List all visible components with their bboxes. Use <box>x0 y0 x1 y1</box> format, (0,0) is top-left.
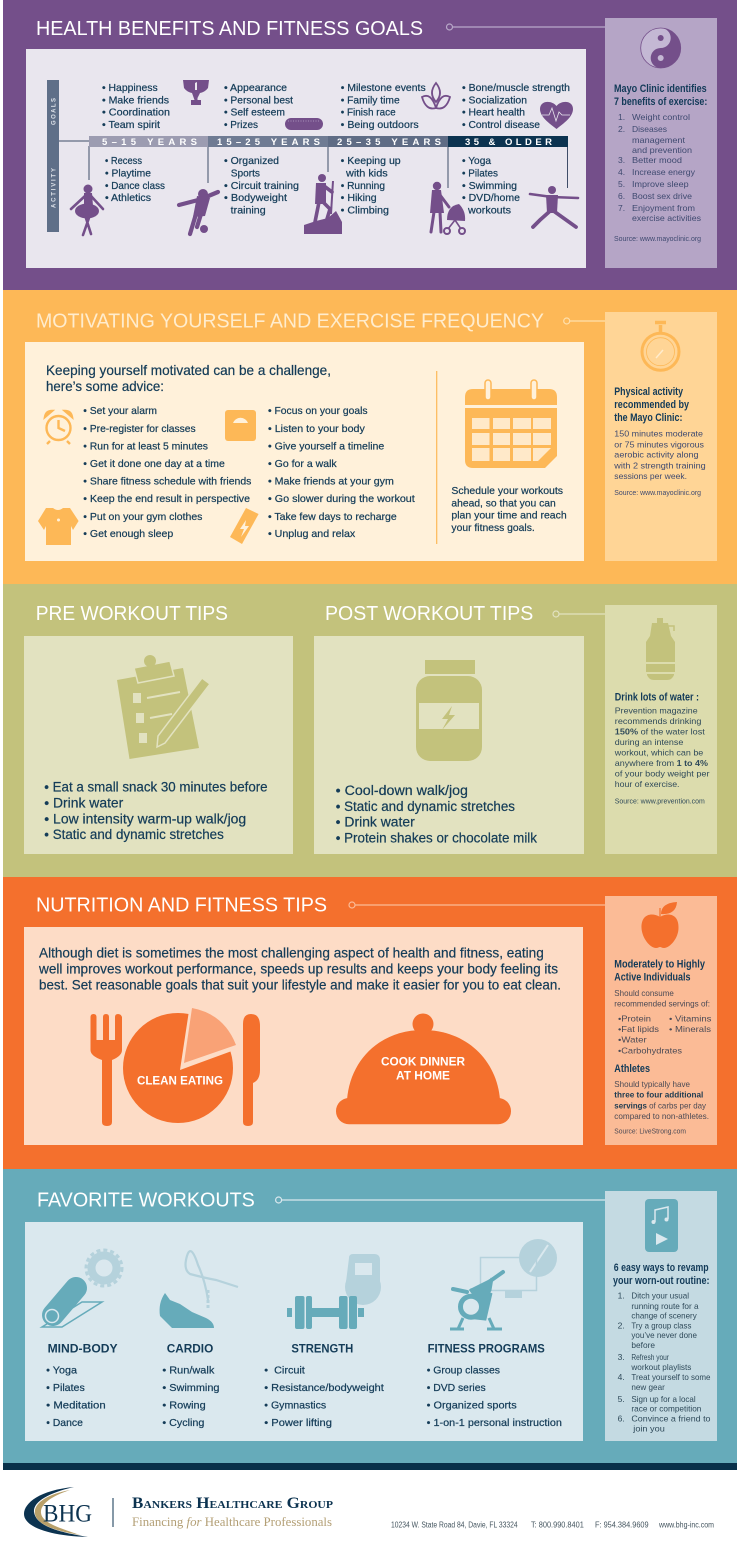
activity list 35 and older: • Swimming <box>462 180 517 192</box>
numbered list: Ditch your usual <box>631 1291 689 1301</box>
schedule note <box>451 485 567 534</box>
activity list 25-35: with kids <box>345 168 388 180</box>
sidebar heading: your worn-out routine: <box>613 1275 710 1287</box>
benefits list: Weight control <box>632 112 690 122</box>
icon: fork <box>90 1014 122 1126</box>
timeline connectors <box>59 141 568 188</box>
post workout list: • Drink water <box>336 815 415 830</box>
sidebar: drink water <box>605 605 717 854</box>
sidebar body: 150% of the water lost <box>615 727 705 737</box>
goals list 35 and older: • Socialization <box>462 94 527 106</box>
sidebar body: hour of exercise. <box>615 779 680 789</box>
panel: pre workout <box>24 636 293 854</box>
icon: cloche: AT HOME <box>396 1071 450 1083</box>
activity list 35 and older: • Yoga <box>462 155 491 167</box>
vertical axis bar <box>47 80 59 232</box>
numbered list: Convince a friend to <box>631 1414 711 1424</box>
fitness programs column: • DVD series <box>427 1382 486 1394</box>
numbered list: Sign up for a local <box>631 1394 696 1404</box>
pre workout list: • Static and dynamic stretches <box>44 827 224 842</box>
advice list column 2: • Make friends at your gym <box>268 476 394 488</box>
goals list 35 and older <box>462 82 570 131</box>
strength column <box>264 1341 384 1429</box>
sidebar body: servings: •Protein <box>618 1013 651 1023</box>
advice list column 2 <box>268 405 415 540</box>
sidebar body: with 2 strength training <box>613 461 706 471</box>
sidebar heading: Drink lots of water : <box>615 692 699 704</box>
panel: workouts <box>25 1222 583 1441</box>
activity list 25-35: • Climbing <box>341 204 389 216</box>
benefits list: Enjoyment from <box>632 203 695 213</box>
sidebar heading: Mayo Clinic identifies <box>614 83 707 95</box>
sidebar body: athletes: compared to non-athletes. <box>614 1111 709 1121</box>
cardio column <box>162 1341 220 1429</box>
divider <box>436 371 438 544</box>
icon: yoga mat <box>42 1288 102 1327</box>
icon: heart with pulse <box>540 102 573 129</box>
activity list 35 and older: workouts <box>467 204 511 216</box>
connector line <box>349 902 605 908</box>
icon: t-shirt <box>38 508 79 545</box>
goals list 15-25 <box>224 82 293 131</box>
sidebar body: athletes: Should typically have <box>614 1079 690 1089</box>
schedule note: Schedule your workouts <box>451 485 563 497</box>
panel: motivation advice <box>25 342 584 561</box>
goals list 35 and older: • Heart health <box>462 107 525 119</box>
mind-body column: • Yoga <box>46 1364 77 1376</box>
icon: disc and monitor <box>480 1239 557 1298</box>
icon: lotus <box>422 83 450 109</box>
advice list column 2: • Take few days to recharge <box>268 511 397 523</box>
tagline: Financing for Healthcare Professionals <box>132 1514 332 1529</box>
source: Source: www.mayoclinic.org <box>614 236 701 243</box>
numbered list: 2. <box>618 1320 625 1330</box>
goals list 15-25: • Self esteem <box>224 107 285 119</box>
strength column: • Resistance/bodyweight <box>264 1382 384 1394</box>
goals list 25-35: • Being outdoors <box>341 119 419 131</box>
benefits list: 6. <box>618 191 625 201</box>
source: Source: LiveStrong.com <box>614 1129 686 1136</box>
pre workout list: • Eat a small snack 30 minutes before <box>44 780 268 795</box>
sidebar body: or 75 minutes vigorous <box>614 440 704 450</box>
sidebar body: servings: •Water <box>618 1035 647 1045</box>
icon: alarm clock <box>45 411 72 444</box>
sidebar body: servings: • Minerals <box>669 1024 711 1034</box>
goals list 25-35: • Milestone events <box>341 82 426 94</box>
mind-body column <box>46 1341 118 1429</box>
activity list 15-25: • Bodyweight <box>224 192 287 204</box>
sidebar body: athletes <box>614 1079 709 1121</box>
benefits list: 7. <box>618 203 625 213</box>
source: Source: www.prevention.com <box>615 799 705 806</box>
post workout list: • Protein shakes or chocolate milk <box>336 830 537 845</box>
mind-body column: • Meditation <box>46 1400 106 1412</box>
logo: BHG swoosh: BHG <box>43 1501 92 1528</box>
section: pre and post workout tips <box>3 584 737 877</box>
benefits list: 2. <box>618 124 625 134</box>
activity list 15-25 <box>224 155 299 216</box>
sidebar body: servings: recommended servings of: <box>614 999 710 1009</box>
sidebar body: anywhere from 1 to 4% <box>615 758 708 768</box>
sidebar body: servings <box>614 988 711 1055</box>
numbered list: Try a group class <box>631 1320 691 1330</box>
icon: yin yang <box>641 28 681 68</box>
age bar <box>89 136 568 148</box>
advice list column 1: • Keep the end result in perspective <box>83 493 250 505</box>
strength column: • Power lifting <box>264 1417 332 1429</box>
sidebar: active individuals <box>605 896 717 1145</box>
activity list 35 and older <box>462 155 520 216</box>
activity list 15-25: training <box>231 204 266 216</box>
benefits list: Improve sleep <box>632 179 689 189</box>
age bar: 15–25 YEARS <box>217 137 320 148</box>
sidebar body: Prevention magazine <box>615 706 698 716</box>
contact details: www.bhg-inc.com <box>658 1520 714 1529</box>
goals list 25-35: • Finish race <box>341 107 396 119</box>
icon: yoga warrior <box>530 186 578 227</box>
icon: dumbbell <box>287 1296 364 1329</box>
sidebar body: servings: •Fat lipids <box>618 1024 659 1034</box>
sidebar heading: recommended by <box>614 399 690 411</box>
activity list 15-25: • Organized <box>224 155 279 167</box>
sidebar body: during an intense <box>615 737 684 747</box>
benefits list: management <box>632 135 686 145</box>
mind-body column: MIND-BODY <box>48 1341 118 1355</box>
icon: ballerina <box>71 184 103 235</box>
icon: clipboard and pencil <box>117 655 210 759</box>
nutrition paragraph: best. Set reasonable goals that suit your lifestyle and make it easier for you to eat clean. <box>39 976 561 992</box>
activity list 25-35: • Running <box>341 180 385 192</box>
pre workout list <box>44 780 268 842</box>
mind-body column: • Dance <box>46 1417 83 1429</box>
advice list column 1: • Set your alarm <box>83 405 157 417</box>
activity list 5-15: • Athletics <box>105 192 151 204</box>
pre workout list: • Low intensity warm-up walk/jog <box>44 811 246 826</box>
sidebar heading <box>614 386 690 424</box>
fitness programs column: FITNESS PROGRAMS <box>428 1341 545 1355</box>
icon: supplement jar <box>416 660 482 761</box>
sidebar body: servings: Should consume <box>614 988 674 998</box>
activity list 5-15: • Dance class <box>105 180 165 192</box>
numbered list: before <box>631 1340 655 1350</box>
strength column: • Gymnastics <box>264 1400 326 1412</box>
activity list 25-35: • Keeping up <box>341 155 401 167</box>
connector line <box>446 24 605 30</box>
sidebar body: servings: • Vitamins <box>669 1013 711 1023</box>
goals list 5-15 <box>102 82 170 131</box>
goals list 25-35 <box>341 82 426 131</box>
advice list column 2: • Go slower during the workout <box>268 493 415 505</box>
contact details: T: 800.990.8401 <box>531 1520 584 1529</box>
sidebar body: athletes: three to four additional <box>614 1090 703 1100</box>
benefits list: exercise activities <box>632 213 701 223</box>
post workout list: • Static and dynamic stretches <box>336 799 515 814</box>
sidebar heading: 6 easy ways to revamp <box>614 1262 709 1274</box>
divider <box>112 1498 114 1527</box>
advice list column 1: • Put on your gym clothes <box>83 511 202 523</box>
icon: plate with wedge <box>123 1004 240 1123</box>
numbered list: 3. <box>618 1352 625 1362</box>
icon: water bottle <box>646 618 675 680</box>
contact details: 10234 W. State Road 84, Davie, FL 33324 <box>391 1520 518 1529</box>
sidebar body: aerobic activity along <box>614 450 699 460</box>
icon: cloche: COOK DINNER <box>381 1057 466 1069</box>
connector line <box>276 1197 605 1203</box>
footer <box>24 1487 714 1537</box>
panel: goals timeline <box>26 49 586 268</box>
sidebar body: servings: •Carbohydrates <box>618 1045 682 1055</box>
icon: apple <box>641 902 679 948</box>
vertical axis bar: GOALS <box>52 98 58 125</box>
activity list 35 and older: • Pilates <box>462 168 498 180</box>
numbered list: change of scenery <box>631 1310 697 1320</box>
sidebar heading: Active Individuals <box>614 972 690 984</box>
sidebar body: recommends drinking <box>615 716 702 726</box>
advice list column 1: • Share fitness schedule with friends <box>83 476 251 488</box>
advice heading: here’s some advice: <box>46 378 164 394</box>
sidebar body: workout, which can be <box>614 748 704 758</box>
activity list 5-15: • Playtime <box>105 168 151 180</box>
goals list 5-15: • Happiness <box>102 82 158 94</box>
post workout list <box>336 783 537 845</box>
fitness programs column <box>427 1341 562 1429</box>
title: motivating: MOTIVATING YOURSELF AND EXERCISE FREQUENCY <box>36 310 544 332</box>
advice list column 1: • Get enough sleep <box>83 528 173 540</box>
benefits list: 4. <box>618 167 625 177</box>
sidebar: mayo clinic benefits <box>605 18 717 268</box>
numbered list: new gear <box>631 1382 665 1392</box>
fitness programs column: • Group classes <box>427 1364 500 1376</box>
activity list 15-25: Sports <box>231 168 260 180</box>
numbered list: join you <box>632 1424 665 1434</box>
icon: music player <box>645 1199 678 1252</box>
numbered list: running route for a <box>631 1301 699 1311</box>
title: pre workout: PRE WORKOUT TIPS <box>36 603 228 625</box>
numbered list: 4. <box>618 1372 625 1382</box>
sidebar: revamp routine <box>605 1191 717 1441</box>
advice list column 2: • Focus on your goals <box>268 405 368 417</box>
sidebar heading <box>614 959 706 984</box>
goals list 5-15: • Team spirit <box>102 119 160 131</box>
icon: gear <box>86 1250 122 1286</box>
connector line <box>564 318 605 324</box>
section: favorite workouts <box>3 1169 737 1463</box>
pre workout list: • Drink water <box>44 796 124 811</box>
numbered list: workout playlists <box>630 1362 691 1372</box>
icon: calendar <box>465 380 557 468</box>
source: Source: www.mayoclinic.org <box>614 490 701 497</box>
advice list column 1: • Run for at least 5 minutes <box>83 440 208 452</box>
strength column: • Circuit <box>264 1364 305 1376</box>
cardio column: • Rowing <box>162 1400 206 1412</box>
title: post workout: POST WORKOUT TIPS <box>325 603 533 625</box>
icon: stopwatch <box>642 322 679 370</box>
icon: energy bar <box>230 508 259 544</box>
nutrition paragraph: Although diet is sometimes the most challenging aspect of health and fitness, eating <box>39 945 544 961</box>
benefits list: 1. <box>618 112 625 122</box>
age bar: 25–35 YEARS <box>337 137 441 148</box>
benefits list <box>618 112 701 223</box>
activity list 5-15 <box>105 155 165 204</box>
benefits list: Better mood <box>632 155 682 165</box>
panel: nutrition <box>24 927 583 1145</box>
activity list 25-35 <box>341 155 401 216</box>
title: health benefits: HEALTH BENEFITS AND FITNESS GOALS <box>36 18 423 40</box>
numbered list <box>618 1291 711 1434</box>
sidebar body <box>614 706 710 789</box>
sidebar heading: 7 benefits of exercise: <box>614 96 707 108</box>
numbered list: Treat yourself to some <box>631 1372 711 1382</box>
advice heading <box>46 362 331 394</box>
cardio column: • Cycling <box>162 1417 204 1429</box>
strength column: STRENGTH <box>291 1341 353 1355</box>
advice list column 1: • Get it done one day at a time <box>83 458 225 470</box>
title: nutrition: NUTRITION AND FITNESS TIPS <box>36 895 327 917</box>
numbered list: you’ve never done <box>631 1330 697 1340</box>
sidebar body: 150 minutes moderate <box>614 429 703 439</box>
goals list 25-35: • Family time <box>341 94 400 106</box>
footer bar <box>3 1463 737 1470</box>
age bar: 35 & OLDER <box>465 137 552 148</box>
advice heading: Keeping yourself motivated can be a challenge, <box>46 362 331 378</box>
icon: soccer player <box>179 189 218 234</box>
advice list column 1 <box>83 405 251 540</box>
connector line <box>553 611 605 617</box>
nutrition paragraph: well improves workout performance, speeds up results and keeps your body feeling its <box>38 960 558 976</box>
activity list 35 and older: • DVD/home <box>462 192 520 204</box>
numbered list: 5. <box>618 1394 625 1404</box>
company name: Bankers Healthcare Group <box>132 1495 333 1512</box>
benefits list: Diseases <box>632 124 667 134</box>
icon: trophy <box>183 80 209 105</box>
contact details <box>391 1520 714 1529</box>
post workout list: • Cool-down walk/jog <box>336 783 468 798</box>
benefits list: 5. <box>618 179 625 189</box>
advice list column 2: • Unplug and relax <box>268 528 356 540</box>
benefits list: 3. <box>618 155 625 165</box>
sidebar heading: Moderately to Highly <box>614 959 706 971</box>
fitness programs column: • 1-on-1 personal instruction <box>427 1417 562 1429</box>
sidebar body: sessions per week. <box>614 471 687 481</box>
athletes heading: Athletes <box>614 1063 650 1075</box>
icon: running shoe <box>160 1293 214 1328</box>
contact details: F: 954.384.9609 <box>595 1520 649 1529</box>
sidebar heading <box>614 83 707 108</box>
sidebar: physical activity <box>605 312 717 561</box>
nutrition paragraph <box>38 945 561 992</box>
icon: exercise bike <box>450 1272 503 1329</box>
activity list 15-25: • Circuit training <box>224 180 299 192</box>
sidebar body: of your body weight per <box>615 769 710 779</box>
advice list column 2: • Give yourself a timeline <box>268 440 384 452</box>
advice list column 2: • Listen to your body <box>268 423 366 435</box>
panel: post workout <box>314 636 584 854</box>
mind-body column: • Pilates <box>46 1382 85 1394</box>
goals list 5-15: • Coordination <box>102 107 170 119</box>
numbered list: race or competition <box>631 1404 702 1414</box>
goals list 15-25: • Personal best <box>224 94 293 106</box>
goals list 15-25: • Prizes <box>224 119 258 131</box>
title: favorite workouts: FAVORITE WORKOUTS <box>37 1190 255 1212</box>
logo: BHG swoosh <box>24 1487 92 1537</box>
icon: kettlebell <box>345 1254 381 1305</box>
activity list 25-35: • Hiking <box>341 192 377 204</box>
benefits list: Increase energy <box>632 167 696 177</box>
section: motivating yourself and exercise frequency <box>3 290 737 584</box>
schedule note: your fitness goals. <box>451 522 535 534</box>
numbered list: 6. <box>618 1414 625 1424</box>
age bar: 5–15 YEARS <box>102 137 197 148</box>
sidebar heading: the Mayo Clinic: <box>614 412 682 424</box>
goals list 15-25: • Appearance <box>224 82 287 94</box>
benefits list: and prevention <box>632 145 692 155</box>
schedule note: plan your time and reach <box>451 510 567 522</box>
goals list 35 and older: • Bone/muscle strength <box>462 82 570 94</box>
section: nutrition and fitness tips <box>3 877 737 1169</box>
icon: plate with wedge: CLEAN EATING <box>137 1075 223 1087</box>
benefits list: Boost sex drive <box>632 191 692 201</box>
icon: elliptical climber <box>304 174 342 234</box>
cardio column: CARDIO <box>167 1341 213 1355</box>
sidebar heading: Physical activity <box>614 386 684 398</box>
icon: knife <box>243 1014 260 1126</box>
activity list 5-15: • Recess <box>105 155 142 167</box>
numbered list: 1. <box>618 1291 625 1301</box>
sidebar body <box>613 429 706 481</box>
sidebar heading <box>613 1262 710 1287</box>
schedule note: ahead, so that you can <box>451 498 556 510</box>
cardio column: • Run/walk <box>162 1364 215 1376</box>
advice list column 2: • Go for a walk <box>268 458 337 470</box>
icon: mother with stroller <box>430 182 465 234</box>
icon: tape measure <box>285 118 323 130</box>
advice list column 1: • Pre-register for classes <box>83 423 196 435</box>
icon: scale <box>225 410 256 441</box>
sidebar body: athletes: servings of carbs per day <box>614 1100 707 1110</box>
vertical axis bar: ACTIVITY <box>52 168 58 208</box>
goals list 35 and older: • Control disease <box>462 119 540 131</box>
numbered list: Refresh your <box>631 1352 669 1362</box>
section: health benefits and fitness goals <box>3 0 737 290</box>
icon: jump rope <box>186 1251 238 1308</box>
icon: cloche <box>336 1014 511 1124</box>
cardio column: • Swimming <box>162 1382 220 1394</box>
fitness programs column: • Organized sports <box>427 1400 517 1412</box>
goals list 5-15: • Make friends <box>102 94 169 106</box>
